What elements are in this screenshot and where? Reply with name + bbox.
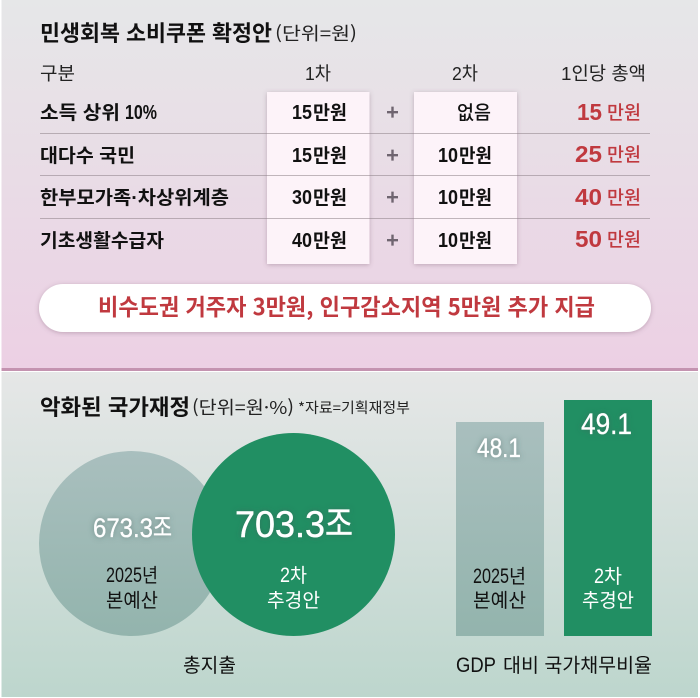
panel: coupon background — [2, 0, 698, 368]
per-person totals: 50 — [575, 226, 602, 252]
first payment amounts: 15 — [292, 145, 312, 167]
column box: second payment — [414, 92, 517, 264]
row labels: 소득 상위 — [40, 102, 120, 124]
callout pill — [39, 284, 651, 332]
second payment amounts: 10 — [438, 145, 458, 167]
column box: first payment — [267, 92, 370, 264]
bar: second supplementary budget: 49.1 — [581, 408, 632, 441]
circle: 2025 budget — [39, 451, 224, 636]
first payment amounts: 만원 — [313, 102, 347, 124]
second payment amounts: 만원 — [459, 230, 492, 252]
circle: second supplementary budget — [192, 433, 395, 636]
table header: 2차 — [452, 63, 478, 84]
table header — [40, 63, 646, 84]
bar: 2025 budget: 본예산 — [473, 584, 526, 613]
per-person totals — [575, 98, 641, 252]
table header: 1차 — [305, 63, 331, 84]
bar: second supplementary budget: 2 — [594, 565, 604, 588]
table header: 1인당 총액 — [561, 63, 646, 84]
row labels — [40, 102, 229, 252]
first payment amounts: 만원 — [313, 230, 347, 252]
row labels: 기초생활수급자 — [40, 230, 165, 252]
row labels: 대다수 국민 — [40, 145, 135, 167]
bar: 2025 budget: 48.1 — [477, 433, 521, 463]
title: fiscal — [40, 390, 410, 422]
row labels: 한부모가족·차상위계층 — [40, 187, 229, 209]
second payment amounts: 10 — [438, 230, 458, 252]
first payment amounts: 만원 — [313, 187, 347, 209]
callout pill: 비수도권 거주자 3만원, 인구감소지역 5만원 추가 지급 — [98, 288, 595, 322]
circle: 2025 budget: 본예산 — [106, 584, 158, 613]
circle: second supplementary budget: 차 — [290, 559, 307, 588]
bar: second supplementary budget: 추경안 — [582, 584, 634, 613]
per-person totals: 만원 — [607, 98, 641, 125]
circle: second supplementary budget: 703.3 — [235, 504, 325, 545]
second payment amounts: 없음 — [457, 98, 491, 125]
second payment amounts: 만원 — [459, 145, 492, 167]
row labels: 10% — [125, 102, 157, 124]
title: fiscal: (단위=원·%) — [192, 394, 294, 420]
label: total expenditure: 총지출 — [183, 649, 236, 678]
circle: 2025 budget: 조 — [153, 508, 172, 544]
per-person totals: 만원 — [607, 183, 641, 210]
per-person totals: 만원 — [607, 225, 641, 252]
second payment amounts: 10 — [438, 187, 458, 209]
first payment amounts — [292, 102, 347, 252]
plus signs — [387, 107, 398, 246]
per-person totals: 25 — [575, 141, 602, 167]
panel: fiscal background — [2, 372, 698, 697]
first payment amounts: 15 — [292, 102, 312, 124]
per-person totals: 15 — [577, 99, 602, 125]
bar: 2025 budget — [456, 422, 544, 636]
label: debt ratio: GDP — [456, 654, 496, 677]
bar: 2025 budget: 년 — [509, 560, 526, 589]
bar: 2025 budget: 2025 — [473, 565, 509, 588]
circle: 2025 budget: 년 — [142, 559, 158, 588]
bar: second supplementary budget — [564, 400, 652, 636]
first payment amounts: 만원 — [313, 145, 347, 167]
table header: 구분 — [40, 63, 75, 84]
second payment amounts — [438, 98, 492, 252]
bar: second supplementary budget: 차 — [604, 560, 622, 589]
label: debt ratio: 대비 국가채무비율 — [503, 649, 652, 678]
first payment amounts: 40 — [292, 230, 312, 252]
circle: 2025 budget: 673.3 — [93, 513, 153, 543]
second payment amounts: 만원 — [459, 187, 492, 209]
section divider — [2, 368, 698, 371]
circle: second supplementary budget: 2 — [280, 564, 290, 587]
title: coupon: 민생회복 소비쿠폰 확정안 — [40, 16, 272, 48]
circle: second supplementary budget: 추경안 — [267, 584, 320, 613]
circle: second supplementary budget: 조 — [325, 496, 353, 547]
title: coupon: (단위=원) — [275, 20, 357, 46]
first payment amounts: 30 — [292, 187, 312, 209]
per-person totals: 40 — [575, 184, 602, 210]
title: fiscal: 악화된 국가재정 — [40, 390, 190, 422]
title: fiscal: *자료=기획재정부 — [298, 397, 410, 418]
per-person totals: 만원 — [607, 140, 641, 167]
circle: 2025 budget: 2025 — [106, 564, 142, 587]
